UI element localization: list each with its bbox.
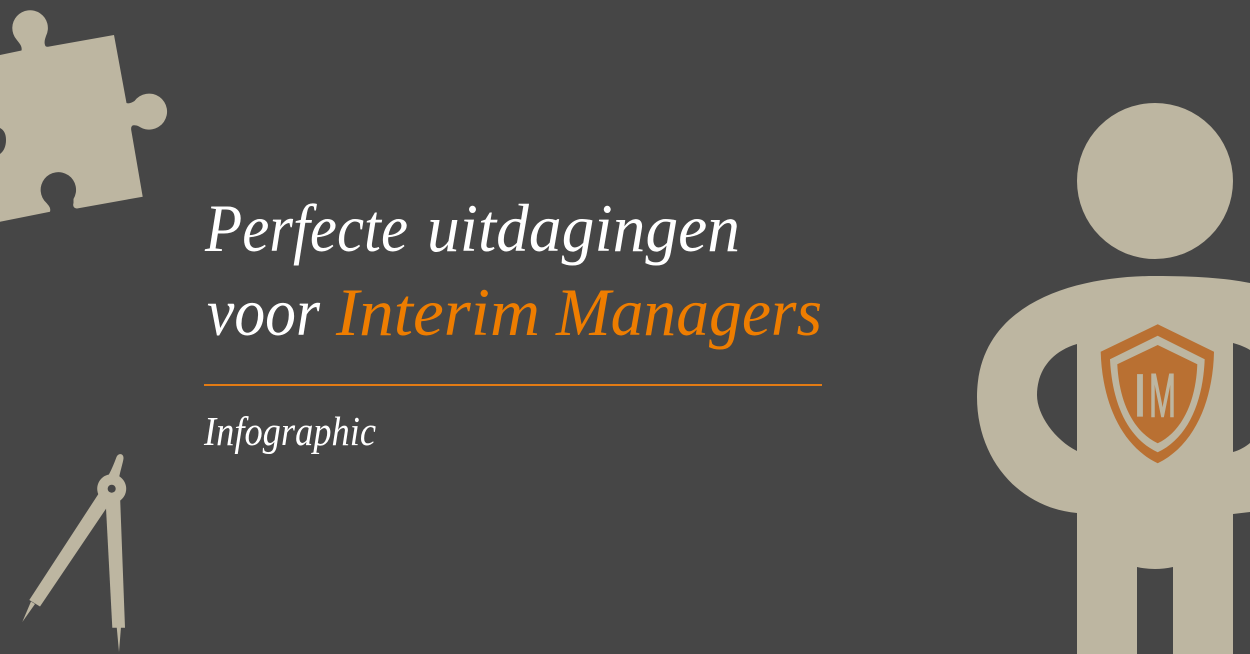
compass left needle — [22, 602, 35, 622]
title word: Perfecte: Perfecte — [204, 190, 408, 266]
shield initials — [1132, 362, 1176, 430]
shield emblem — [1101, 324, 1214, 463]
figure body — [977, 276, 1250, 654]
compass right needle — [117, 627, 121, 652]
initial I: I — [1132, 362, 1148, 430]
title word: voor: voor — [207, 274, 320, 350]
initial M: M — [1149, 362, 1176, 430]
figure head — [1077, 103, 1233, 259]
title highlight: Interim: Interim — [335, 274, 540, 350]
compass hinge — [97, 474, 126, 503]
figure: interim manager superhero — [977, 103, 1250, 654]
subtitle: Infographic — [203, 408, 376, 454]
compass left leg — [29, 490, 113, 606]
title word: uitdagingen: uitdagingen — [427, 190, 740, 266]
shield band — [1110, 336, 1205, 452]
compass right leg — [106, 495, 125, 628]
orange divider — [204, 384, 822, 386]
title highlight: Managers: Managers — [555, 274, 822, 350]
icon: drawing compass — [22, 454, 126, 652]
icon: puzzle piece — [0, 10, 167, 222]
title line 1 — [204, 190, 740, 266]
title line 2 — [207, 274, 822, 350]
shield inner — [1117, 345, 1197, 443]
shield outer — [1101, 324, 1214, 463]
compass handle — [107, 454, 124, 478]
